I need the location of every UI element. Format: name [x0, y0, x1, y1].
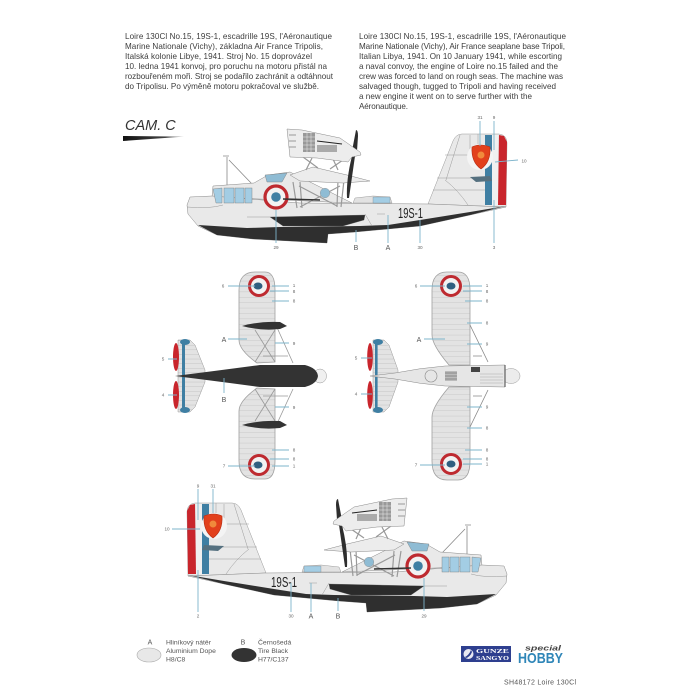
aircraft: lower side view — [187, 498, 507, 612]
upper wing — [324, 536, 404, 552]
callouts: underside plan view: 8 — [486, 456, 489, 462]
callouts: lower side view: A — [309, 614, 314, 620]
tail emblem — [201, 513, 227, 539]
wing struts — [255, 323, 293, 428]
legend: colour B: B — [241, 640, 246, 646]
callouts: upper side view — [273, 115, 527, 252]
callouts: underside plan view: A — [417, 337, 422, 344]
text block: English description: Aéronautique. — [359, 102, 408, 111]
text block: Czech description: Marine Nationale (Vichy), základna Air France Tripolis, — [125, 42, 323, 51]
text block: Czech description — [125, 32, 334, 91]
callouts: underside plan view: 7 — [415, 462, 418, 468]
engine pylon — [351, 526, 391, 539]
callouts: top plan view: 7 — [223, 464, 226, 468]
hull — [188, 565, 507, 612]
text block: Czech description: rozbouřeném moři. Stroj se podařilo zachránit a odtáhnout — [125, 72, 334, 81]
hull — [187, 196, 506, 243]
callouts: lower side view: 10 — [164, 526, 170, 532]
hull details — [187, 205, 385, 226]
rudder stripes — [367, 339, 383, 413]
centre strut bar — [374, 568, 411, 569]
fin stripes — [187, 504, 209, 574]
tail — [373, 340, 398, 412]
aircraft: underside plan view — [367, 272, 520, 480]
legend: colour B — [232, 638, 291, 664]
text block: English description: Marine Nationale (Vichy), Air France seaplane base Tripoli, — [359, 42, 565, 51]
callouts: top plan view: A — [222, 337, 227, 344]
callouts: underside plan view: 1 — [486, 283, 489, 288]
callouts: top plan view: 5 — [162, 356, 165, 362]
fin stripes — [485, 135, 507, 205]
callouts: underside plan view: 4 — [355, 392, 358, 396]
engine nacelle — [333, 498, 407, 531]
aircraft: upper side view — [187, 129, 507, 243]
text block: Czech description: Italská kolonie Libye, 1941. Stroj No. 15 doprovázel — [125, 52, 312, 61]
text block: Czech description: 10. ledna 1941 konvoj, pro poruchu na motoru přistál na — [125, 62, 327, 71]
black fuselage — [175, 365, 318, 387]
callouts: upper side view: 9 — [493, 115, 496, 120]
callouts: lower side view: 30 — [288, 614, 294, 618]
callouts: underside plan view: 6 — [415, 284, 418, 288]
callouts: top plan view — [162, 283, 296, 468]
callouts: upper side view: A — [386, 245, 391, 252]
float — [270, 215, 365, 226]
rear cockpit — [302, 565, 341, 572]
legend: colour A — [137, 640, 216, 664]
callouts: top plan view: 9 — [293, 341, 296, 346]
cabin roof — [342, 541, 482, 572]
spinner — [502, 368, 520, 384]
callouts: underside plan view — [355, 283, 489, 468]
hull roundel — [265, 186, 287, 208]
swatch: tire black — [232, 648, 256, 662]
engine pylon — [303, 157, 343, 170]
cabin roof — [212, 172, 352, 203]
callouts: underside plan view: 8 — [486, 320, 489, 326]
callouts: upper side view: 30 — [417, 245, 423, 250]
text block: English description: Loire 130Cl No.15, 19S-1, escadrille 19S, l'Aéronautique — [359, 32, 566, 41]
spinner — [314, 369, 326, 383]
float — [329, 584, 424, 595]
callouts: top plan view: 1 — [293, 464, 296, 468]
callouts: lower side view — [164, 484, 427, 620]
aircraft: top surface plan view — [173, 272, 326, 479]
text block: English description: Italian Libya, 1941. On 10 January 1941, while escorting — [359, 52, 562, 61]
callouts: upper side view: 10 — [521, 158, 527, 164]
text block: English description: salvaged though, tugged to Tripoli and having received — [359, 82, 556, 91]
product caption: SH48172 Loire 130Cl — [504, 680, 576, 686]
upper wing — [290, 167, 370, 183]
callouts: upper side view: B — [354, 245, 359, 252]
logo: Special Hobby: HOBBY — [518, 650, 563, 667]
callouts: top plan view: 8 — [293, 298, 296, 304]
callouts: upper side view: 29 — [273, 245, 279, 250]
callouts: top plan view: 8 — [293, 456, 296, 462]
fin detail lines — [433, 134, 485, 205]
logo: Special Hobby: special — [525, 644, 562, 652]
colour A name: Aluminium Dope — [166, 648, 216, 655]
text block: Czech description: Loire 130Cl No.15, 19S-1, escadrille 19S, l'Aéronautique — [125, 32, 332, 41]
heading underline wedge — [123, 136, 184, 141]
colour B name: H77/C137 — [258, 656, 289, 664]
callouts: top plan view: 4 — [162, 392, 165, 398]
colour B name — [258, 638, 291, 664]
tailplane — [202, 545, 224, 551]
text block: English description — [359, 32, 566, 111]
text block: English description: a new engine it went on to serve further with the — [359, 92, 532, 101]
callouts: top plan view: 6 — [222, 284, 225, 288]
text block: Czech description: do Tripolisu. Po výměně motoru pokračoval ve službě. — [125, 82, 319, 91]
callouts: underside plan view: 1 — [486, 462, 489, 466]
hull underside — [198, 206, 506, 243]
brace struts — [470, 325, 488, 427]
propeller — [347, 130, 358, 198]
callouts: underside plan view: 8 — [486, 448, 489, 452]
rudder stripes — [173, 339, 190, 413]
tail fin — [428, 134, 507, 207]
callouts: top plan view: 1 — [293, 283, 296, 288]
callouts: top plan view: B — [222, 397, 227, 404]
callouts: upper side view: 31 — [477, 115, 483, 120]
text block: English description: a naval convoy, the engine of Loire no.15 failed and the — [359, 62, 558, 71]
wing porthole — [364, 557, 374, 567]
heading: CAM. C: CAM. C — [125, 118, 176, 134]
callouts: lower side view: 29 — [421, 614, 427, 618]
text block: English description: crew was forced to land on rough seas. The machine was — [359, 72, 563, 81]
fin detail lines — [209, 503, 261, 574]
logo: Gunze Sangyo: SANGYO — [476, 655, 509, 662]
fuselage details — [425, 365, 505, 387]
windscreen — [407, 542, 429, 551]
tail — [178, 340, 205, 412]
roundels — [250, 276, 268, 474]
propeller — [336, 499, 347, 567]
callouts: top plan view: 8 — [293, 289, 296, 294]
logo: Gunze Sangyo — [461, 646, 511, 662]
engine nacelle — [287, 129, 361, 162]
colour A name: Hliníkový nátěr — [166, 640, 212, 646]
lower wing half — [239, 388, 275, 479]
cabin windows — [442, 557, 481, 572]
callouts: underside plan view: 5 — [355, 356, 358, 360]
logo: Gunze Sangyo: GUNZE — [476, 648, 509, 655]
colour B name: Tire Black — [258, 648, 289, 655]
tailplane — [470, 176, 492, 182]
callouts: underside plan view: 8 — [486, 298, 489, 304]
callouts: lower side view: B — [336, 614, 341, 620]
callouts: top plan view: 8 — [293, 448, 296, 452]
callouts: upper side view: 3 — [493, 245, 496, 250]
radio mast — [223, 156, 252, 186]
colour A name — [166, 640, 216, 664]
logo: Special Hobby — [518, 644, 563, 667]
tail fin — [187, 503, 266, 576]
radio mast — [442, 525, 471, 555]
cabin windows — [213, 188, 252, 203]
fuselage code: 19S-1 — [398, 205, 423, 222]
windscreen — [265, 173, 287, 182]
callouts: lower side view: 9 — [197, 484, 200, 488]
hull roundel — [407, 555, 429, 577]
swatch: aluminium dope — [137, 648, 161, 662]
callouts: underside plan view: 9 — [486, 404, 489, 410]
fuselage code: lower side view: 19S-1 — [271, 574, 297, 591]
callouts: lower side view: 2 — [197, 614, 200, 618]
wing porthole — [320, 188, 330, 198]
tail emblem — [467, 144, 493, 170]
lower wing half — [432, 387, 470, 480]
upper wing half — [239, 272, 275, 363]
callouts: underside plan view: 8 — [486, 289, 489, 294]
hull details — [309, 574, 507, 595]
upper wing half — [432, 272, 470, 365]
wing floats — [242, 322, 287, 429]
callouts: underside plan view: 9 — [486, 342, 489, 346]
callouts: top plan view: 9 — [293, 405, 296, 410]
legend: colour A: A — [148, 640, 153, 646]
colour A name: H8/C8 — [166, 656, 185, 664]
fuselage — [370, 365, 505, 387]
hull underside — [188, 575, 496, 612]
rear cockpit — [353, 196, 392, 203]
roundels — [442, 276, 460, 474]
colour B name: Černošedá — [258, 638, 291, 646]
wing struts — [350, 549, 401, 577]
callouts: underside plan view: 8 — [486, 426, 489, 430]
centre strut bar — [283, 199, 320, 200]
callouts: lower side view: 31 — [210, 484, 216, 488]
wing struts — [293, 180, 344, 208]
